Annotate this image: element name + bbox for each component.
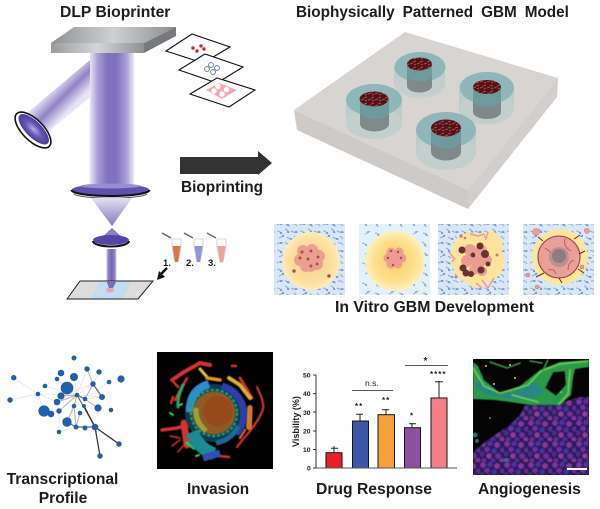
panels: in vitro GBM development <box>274 224 594 295</box>
lower beam <box>106 249 116 288</box>
tumor nuclei <box>473 397 589 475</box>
network edges <box>10 369 119 456</box>
error bars <box>331 381 443 453</box>
tube numbers: 1. <box>163 258 171 269</box>
side light beam <box>27 60 90 133</box>
bar chart: viability drug response <box>291 356 457 472</box>
well front <box>416 112 476 170</box>
label: Transcriptional Profile: Profile <box>39 490 88 507</box>
well left <box>346 84 402 139</box>
significance brackets: ** <box>382 396 390 405</box>
small lens <box>93 235 129 247</box>
focusing cone <box>91 198 132 226</box>
significance brackets: * <box>410 412 414 420</box>
central tumor core <box>192 392 236 434</box>
y axis title: Visbility (%) <box>291 396 301 447</box>
y axis: 40 <box>303 391 311 398</box>
y axis: 0 <box>307 466 311 472</box>
label: Angiogenesis: Angiogenesis <box>478 481 581 498</box>
mirror plate <box>51 27 176 53</box>
cyan cells <box>472 432 508 462</box>
y axis: 50 <box>303 372 311 380</box>
tube 2 <box>184 233 203 262</box>
arrow: to slide <box>157 268 167 280</box>
glass slide <box>67 281 153 299</box>
significance brackets: ** <box>355 402 363 411</box>
main lens <box>72 184 150 198</box>
title: Biophysically Patterned GBM Model: Biophysically Patterned GBM Model <box>296 4 569 21</box>
y axis: 30 <box>303 410 311 417</box>
side lens <box>9 106 57 154</box>
mask card 3 <box>190 78 255 107</box>
label: Drug Response: Drug Response <box>316 481 432 498</box>
hydrogel slab model <box>294 32 558 209</box>
label: Transcriptional Profile: Transcriptional <box>7 471 118 488</box>
tube numbers <box>163 258 216 269</box>
yellow speckles <box>485 364 562 419</box>
tube numbers: 3. <box>208 258 216 269</box>
tube numbers: 2. <box>186 258 194 269</box>
label: Bioprinting: Bioprinting <box>181 179 263 196</box>
baseline <box>316 467 457 469</box>
orange and yellow invasion <box>200 369 250 438</box>
bars <box>326 398 447 468</box>
green vessels <box>473 360 589 405</box>
scale bar <box>567 468 587 470</box>
mask card 1 <box>166 34 230 63</box>
title: DLP Bioprinter: DLP Bioprinter <box>60 4 170 21</box>
well right <box>459 72 514 124</box>
stage 3 panel <box>438 224 509 295</box>
stage 2 panel <box>359 224 430 295</box>
well back-left <box>394 52 446 98</box>
y axis <box>303 372 316 472</box>
significance brackets <box>352 356 448 420</box>
red outer invasion front <box>162 363 263 457</box>
tube 1 <box>162 233 181 262</box>
mask card 2 <box>179 54 243 83</box>
significance brackets: **** <box>430 370 446 379</box>
network nodes <box>7 356 125 459</box>
image: invasion map <box>157 352 273 469</box>
significance brackets: * <box>424 356 428 367</box>
slab <box>294 32 558 209</box>
significance brackets: n.s. <box>365 378 379 388</box>
label: In Vitro GBM Development: In Vitro GBM Development <box>335 299 535 316</box>
network graph: transcriptional profile <box>7 356 125 459</box>
main light beam <box>90 53 134 191</box>
digital mask patterns <box>166 34 255 107</box>
bioink tubes <box>157 233 226 280</box>
icon: DLP bioprinter optics <box>9 27 176 299</box>
stage 4 panel <box>523 224 594 295</box>
stage 1 panel <box>274 224 345 295</box>
y axis: 10 <box>303 447 311 454</box>
label: Invasion: Invasion <box>187 481 249 498</box>
inverted cone <box>101 228 123 238</box>
green speckles <box>170 385 199 456</box>
y axis: 20 <box>303 428 311 436</box>
blue ring <box>185 384 244 458</box>
image: angiogenesis microscopy <box>472 359 589 475</box>
tube 3 <box>207 233 226 262</box>
arrow: bioprinting <box>180 151 272 175</box>
